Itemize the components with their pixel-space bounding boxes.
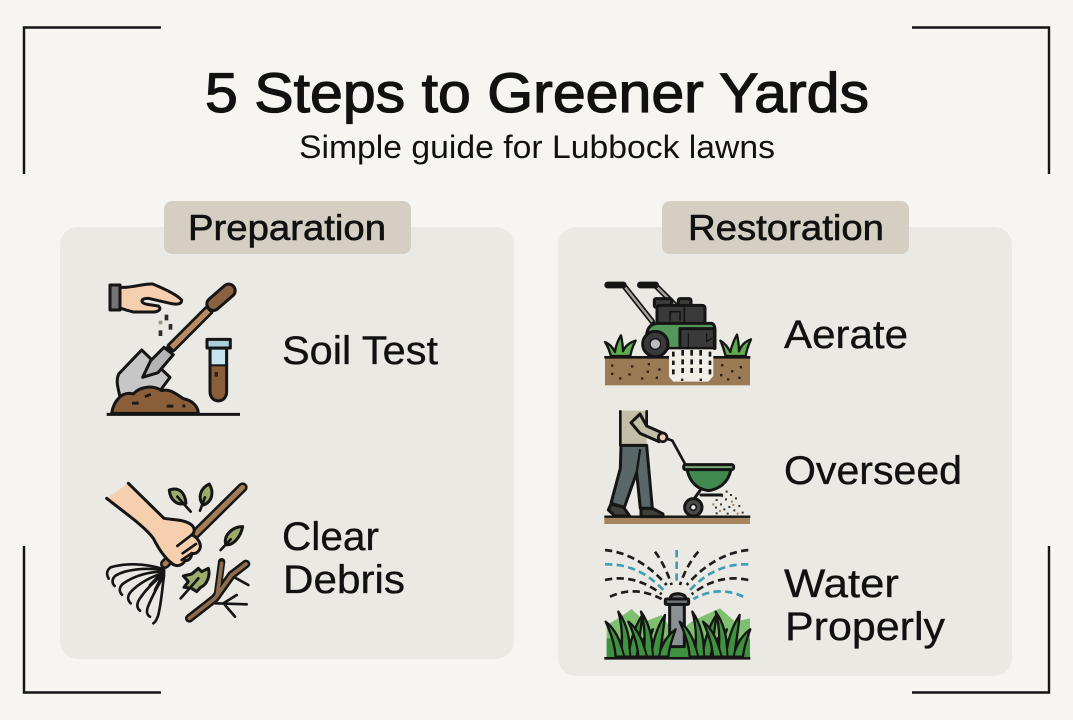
sprinkler stem (670, 604, 684, 647)
panel: preparation (60, 201, 514, 659)
shovel blade (117, 350, 170, 400)
spreader handle (667, 439, 686, 465)
icon: soil test (107, 284, 240, 414)
seeds (715, 491, 744, 515)
soil strip (605, 358, 750, 385)
twigs (189, 564, 246, 618)
label: soil test: Soil Test (282, 329, 438, 373)
aerator handles (623, 285, 677, 322)
grass backdrop (607, 608, 750, 658)
wheel (643, 331, 668, 357)
legs (611, 445, 652, 508)
wheel (685, 499, 702, 516)
test tube (210, 348, 227, 401)
label: clear debris: Debris (283, 558, 405, 602)
label: water properly: Water (784, 562, 899, 606)
subtitle: Simple guide for Lubbock lawns (299, 129, 775, 165)
label: overseed: Overseed (784, 449, 962, 493)
icon: clear debris (107, 483, 248, 623)
heading: preparation (164, 201, 411, 254)
shovel socket (143, 347, 173, 377)
shovel handle (172, 311, 208, 347)
grass tufts (605, 335, 636, 356)
label: clear debris (282, 515, 405, 602)
rake handle (165, 487, 243, 564)
label: water properly (784, 562, 945, 649)
leaves (169, 489, 186, 504)
icon: sprinkler (604, 550, 750, 658)
water spray (605, 550, 748, 599)
hand and cuff (120, 284, 182, 312)
ground line (107, 410, 240, 419)
title: 5 Steps to Greener Yards (205, 61, 869, 124)
aerated zone (669, 349, 713, 382)
label: aerate: Aerate (784, 313, 908, 357)
shoes (608, 504, 630, 516)
engine (654, 299, 672, 307)
sprinkler head (670, 594, 686, 601)
grass tufts (606, 612, 653, 657)
soil mound (112, 387, 198, 413)
heading: preparation: Preparation (188, 207, 386, 248)
torso (620, 411, 647, 445)
label: water properly: Properly (785, 605, 945, 649)
heading: restoration (662, 201, 909, 254)
hopper (687, 469, 731, 491)
arm (631, 414, 663, 442)
arm and hand (107, 483, 200, 566)
ground strip (604, 517, 750, 524)
soil specks (611, 363, 742, 381)
heading: restoration: Restoration (688, 207, 884, 248)
ground line (604, 654, 750, 662)
aerator body (647, 323, 715, 348)
icon: seed spreader with person (604, 411, 750, 524)
icon: aerator (604, 285, 751, 385)
panel: restoration (558, 201, 1012, 676)
rake tines (107, 564, 164, 623)
label: clear debris: Clear (282, 515, 379, 559)
